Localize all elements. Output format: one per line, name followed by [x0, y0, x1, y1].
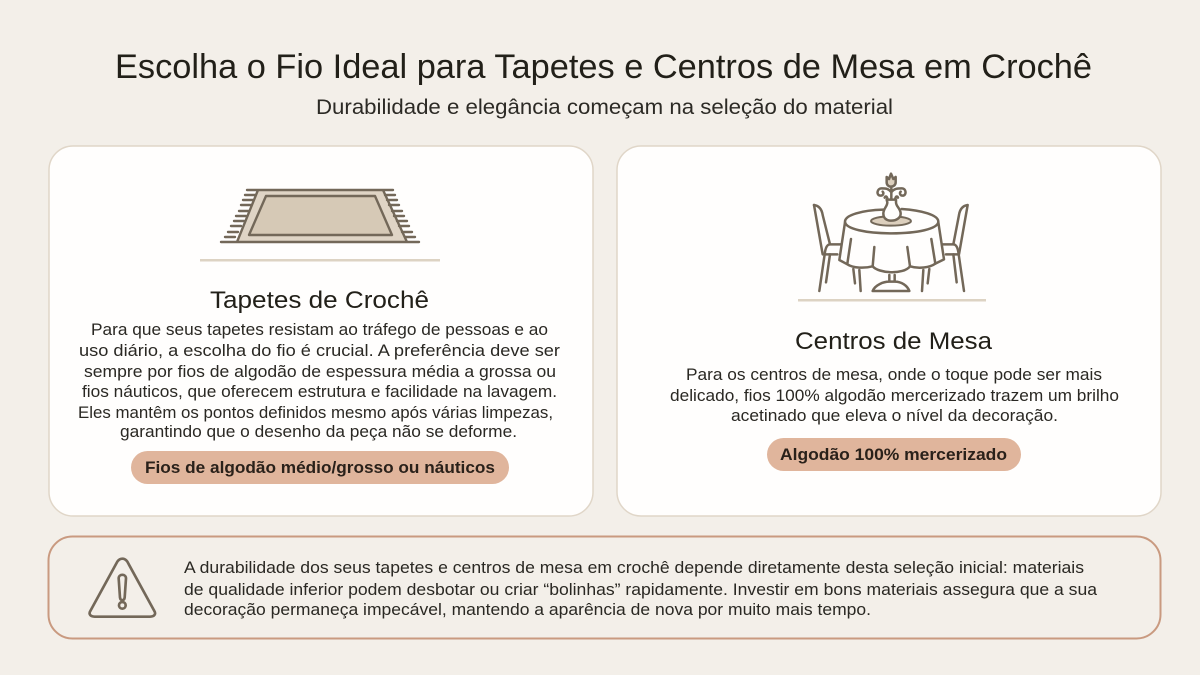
icon: rug	[221, 190, 419, 242]
body text: delicado, fios 100% algodão mercerizado trazem um brilho	[670, 387, 1119, 405]
body text: sempre por fios de algodão de espessura média a grossa ou	[84, 363, 556, 381]
warning text: decoração permaneça impecável, mantendo a aparência de nova por muito mais tempo.	[184, 601, 871, 619]
subtitle: Durabilidade e elegância começam na seleção do material	[316, 96, 893, 119]
divider	[798, 299, 986, 302]
divider	[200, 259, 440, 262]
pill: recommendation	[131, 451, 509, 484]
body text: Eles mantêm os pontos definidos mesmo após várias limpezas,	[78, 404, 553, 422]
body text: garantindo que o desenho da peça não se deforme.	[120, 423, 517, 441]
callout: warning	[48, 536, 1160, 638]
pill: recommendation	[767, 438, 1021, 471]
body text: acetinado que eleva o nível da decoração.	[731, 407, 1058, 425]
body text: uso diário, a escolha do fio é crucial. A preferência deve ser	[79, 342, 561, 360]
warning text: A durabilidade dos seus tapetes e centros de mesa em crochê depende diretamente desta seleção inicial: materiais	[184, 559, 1084, 577]
body text: Para que seus tapetes resistam ao tráfego de pessoas e ao	[91, 321, 548, 339]
icon: table with vase	[814, 174, 968, 291]
pill: recommendation: Algodão 100% mercerizado	[780, 445, 1007, 464]
panel: centros de mesa	[617, 146, 1161, 516]
body text	[78, 321, 561, 441]
body text: Para os centros de mesa, onde o toque pode ser mais	[686, 366, 1102, 384]
title: Escolha o Fio Ideal para Tapetes e Centros de Mesa em Crochê	[115, 48, 1092, 86]
header	[115, 48, 1092, 119]
warning text	[184, 559, 1098, 619]
panel: tapetes de crochê	[49, 146, 593, 516]
heading: Tapetes de Crochê	[210, 287, 429, 314]
warning text: de qualidade inferior podem desbotar ou criar “bolinhas” rapidamente. Investir em bons materiais assegura que a sua	[184, 581, 1098, 599]
body text: fios náuticos, que oferecem estrutura e facilidade na lavagem.	[82, 383, 557, 401]
icon: warning triangle	[90, 559, 155, 617]
body text	[670, 366, 1119, 425]
pill: recommendation: Fios de algodão médio/grosso ou náuticos	[145, 458, 495, 477]
heading: Centros de Mesa	[795, 328, 993, 355]
